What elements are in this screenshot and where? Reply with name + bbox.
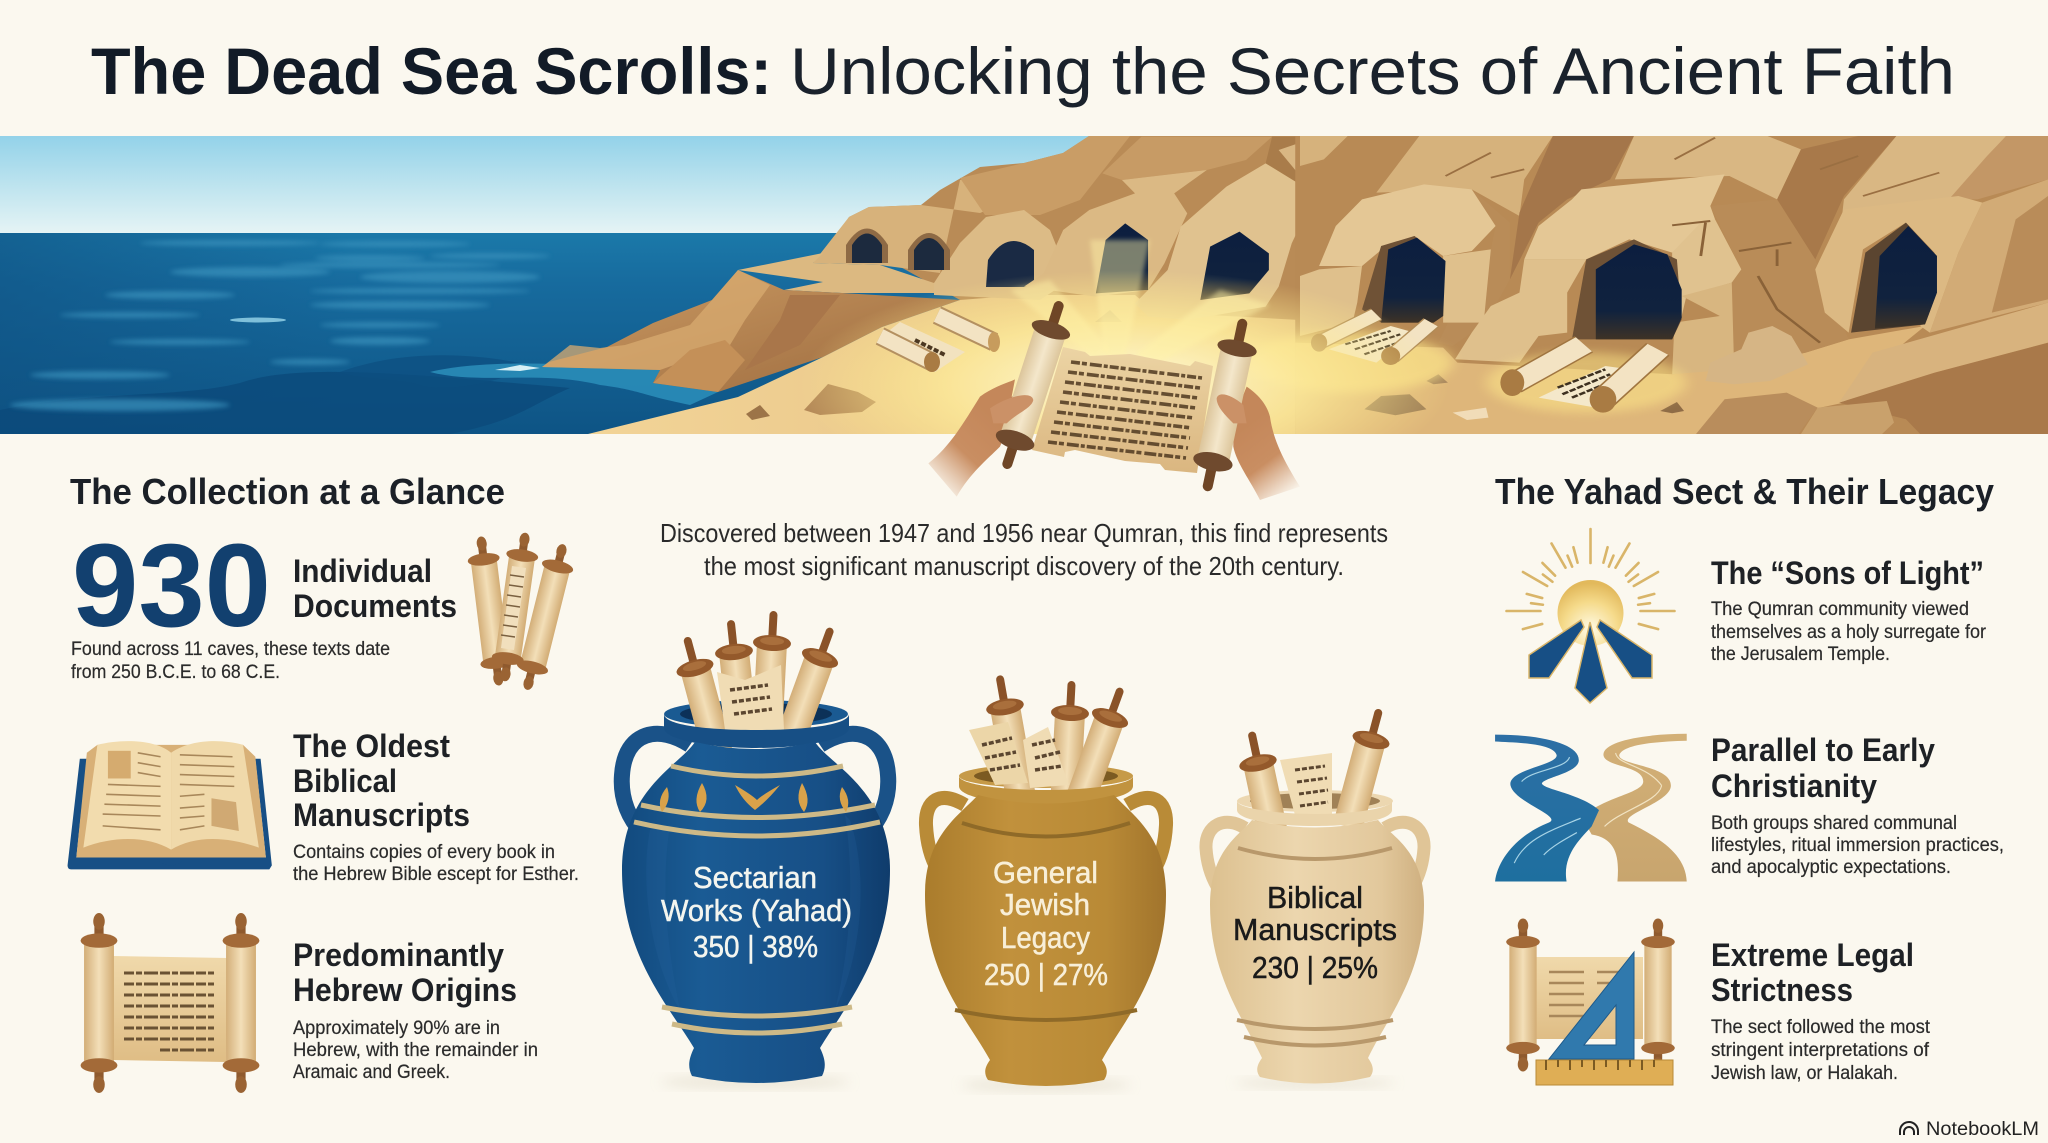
intro text: Discovered between 1947 and 1956 near Qumran, this find represents bbox=[660, 518, 1388, 548]
text: oldest manuscripts bbox=[293, 728, 579, 885]
text: hebrew origins: Approximately 90% are in bbox=[293, 1018, 500, 1039]
icon: converging rivers bbox=[1495, 734, 1687, 881]
icon: sun and rays bbox=[1506, 529, 1674, 703]
scroll rollers bbox=[987, 295, 1079, 475]
text: sons of light: The “Sons of Light” bbox=[1711, 555, 1984, 591]
text: oldest manuscripts: Contains copies of every book in bbox=[293, 842, 555, 863]
plateau bbox=[738, 254, 934, 293]
text: legal strictness: Extreme Legal bbox=[1711, 937, 1914, 973]
label: general jewish legacy: Jewish bbox=[1000, 887, 1090, 922]
stat: 930 documents: from 250 B.C.E. to 68 C.E. bbox=[71, 662, 280, 683]
text: oldest manuscripts: the Hebrew Bible escept for Esther. bbox=[293, 864, 579, 885]
arch 3 bbox=[1815, 196, 1982, 333]
text: hebrew origins: Hebrew Origins bbox=[293, 972, 517, 1008]
jar: general jewish legacy bbox=[925, 672, 1166, 1091]
label: biblical manuscripts bbox=[1233, 880, 1397, 985]
ground bbox=[1295, 326, 1925, 434]
central open scroll held by hands bbox=[928, 295, 1300, 500]
cave: c5 bbox=[1200, 232, 1269, 300]
panel: yahad sect and legacy bbox=[1495, 471, 2004, 1085]
left hand bbox=[928, 379, 1033, 497]
title: The Dead Sea Scrolls: bbox=[91, 34, 772, 108]
stat: 930 documents: Found across 11 caves, these texts date bbox=[71, 639, 390, 660]
text: oldest manuscripts: The Oldest bbox=[293, 728, 450, 764]
stat: 930 documents: 930 bbox=[72, 520, 271, 652]
icon: scroll with set square and ruler bbox=[1506, 918, 1675, 1085]
foreground rocks bbox=[1364, 303, 2048, 434]
scroll on sand, large bbox=[1500, 344, 1658, 413]
icon: open book bbox=[68, 741, 272, 869]
cave: c4 bbox=[1096, 223, 1148, 293]
upper arch rocks bbox=[813, 180, 983, 273]
text: parallel to christianity: Both groups shared communal bbox=[1711, 813, 1957, 834]
arch 2 bbox=[1455, 174, 1849, 374]
scroll glow bbox=[1486, 353, 1686, 413]
text: hebrew origins: Hebrew, with the remainder in bbox=[293, 1040, 538, 1061]
text: parallel to christianity bbox=[1711, 732, 2004, 878]
scrolls in gold jar bbox=[969, 672, 1139, 809]
jar: biblical manuscripts bbox=[1206, 704, 1424, 1088]
label: biblical manuscripts: 230 | 25% bbox=[1252, 950, 1378, 985]
text: sons of light: the Jerusalem Temple. bbox=[1711, 644, 1890, 665]
title bbox=[91, 34, 1955, 108]
text: sons of light: The Qumran community viewed bbox=[1711, 599, 1969, 620]
text: parallel to christianity: and apocalyptic expectations. bbox=[1711, 857, 1951, 878]
panel: the collection at a glance bbox=[68, 471, 579, 1093]
stat: 930 documents: Documents bbox=[293, 588, 457, 624]
label: sectarian works: Sectarian bbox=[693, 860, 817, 895]
jar: sectarian works bbox=[622, 610, 890, 1088]
stat: 930 documents: Individual bbox=[293, 553, 432, 589]
text: hebrew origins: Aramaic and Greek. bbox=[293, 1062, 450, 1083]
cliff mass bbox=[848, 136, 1296, 320]
caves left group: small upper caves bbox=[846, 210, 1070, 300]
sky bbox=[0, 136, 1089, 233]
stat: 930 documents bbox=[71, 520, 457, 683]
arch 1 bbox=[1300, 184, 1496, 336]
label: sectarian works: Works (Yahad) bbox=[661, 893, 852, 928]
light glow bbox=[814, 272, 1430, 434]
label: general jewish legacy: Legacy bbox=[1001, 920, 1090, 955]
jar chart: collection composition bbox=[622, 610, 1424, 1091]
scrolls in beige jar bbox=[1233, 704, 1398, 855]
scrolls in blue jar bbox=[668, 610, 849, 760]
text: parallel to christianity: Parallel to Early bbox=[1711, 732, 1935, 768]
label: sectarian works: 350 | 38% bbox=[693, 929, 818, 964]
text: legal strictness: Strictness bbox=[1711, 972, 1853, 1008]
text: sons of light bbox=[1711, 555, 1987, 665]
text: oldest manuscripts: Manuscripts bbox=[293, 797, 470, 833]
sea bbox=[0, 233, 1000, 434]
icon: open scroll bbox=[81, 913, 259, 1093]
label: sectarian works bbox=[661, 860, 852, 964]
text: parallel to christianity: lifestyles, ritual immersion practices, bbox=[1711, 835, 2004, 856]
scroll on sand, left bbox=[880, 315, 1000, 372]
label: general jewish legacy: General bbox=[993, 855, 1098, 890]
heading: collection: The Collection at a Glance bbox=[70, 471, 505, 512]
parchment sheet bbox=[1032, 347, 1213, 473]
label: general jewish legacy bbox=[984, 855, 1108, 992]
rocks on the sand, left bbox=[746, 310, 1122, 420]
label: biblical manuscripts: Biblical bbox=[1267, 880, 1363, 915]
cliff face bbox=[542, 270, 960, 392]
title: Unlocking the Secrets of Ancient Faith bbox=[790, 34, 1955, 108]
ground sand bbox=[588, 295, 1296, 434]
text: legal strictness: The sect followed the most bbox=[1711, 1017, 1931, 1038]
icon: three scrolls bbox=[465, 531, 579, 694]
text: parallel to christianity: Christianity bbox=[1711, 768, 1877, 804]
text: hebrew origins bbox=[293, 937, 538, 1083]
cave: high window bbox=[1308, 180, 1337, 214]
text: legal strictness: stringent interpretations of bbox=[1711, 1040, 1930, 1061]
text: hebrew origins: Predominantly bbox=[293, 937, 504, 973]
scroll on sand, middle bbox=[1311, 314, 1431, 365]
cliff columns and arches, centre bbox=[1024, 136, 1296, 315]
label: biblical manuscripts: Manuscripts bbox=[1233, 912, 1397, 947]
text: oldest manuscripts: Biblical bbox=[293, 763, 397, 799]
notebooklm watermark: NotebookLM bbox=[1926, 1119, 2039, 1140]
text: legal strictness: Jewish law, or Halakah. bbox=[1711, 1063, 1898, 1084]
text: legal strictness bbox=[1711, 937, 1931, 1084]
right hand bbox=[1217, 387, 1300, 500]
cliffs, arches and caves, right bbox=[1243, 136, 2048, 434]
intro text: the most significant manuscript discovery of the 20th century. bbox=[704, 551, 1344, 581]
intro text bbox=[660, 518, 1388, 581]
heading: yahad: The Yahad Sect & Their Legacy bbox=[1495, 471, 1994, 512]
thumbs bbox=[990, 394, 1247, 423]
hero banner: sea, cliffs and caves bbox=[0, 136, 2048, 434]
text: sons of light: themselves as a holy surregate for bbox=[1711, 622, 1987, 643]
label: general jewish legacy: 250 | 27% bbox=[984, 957, 1108, 992]
